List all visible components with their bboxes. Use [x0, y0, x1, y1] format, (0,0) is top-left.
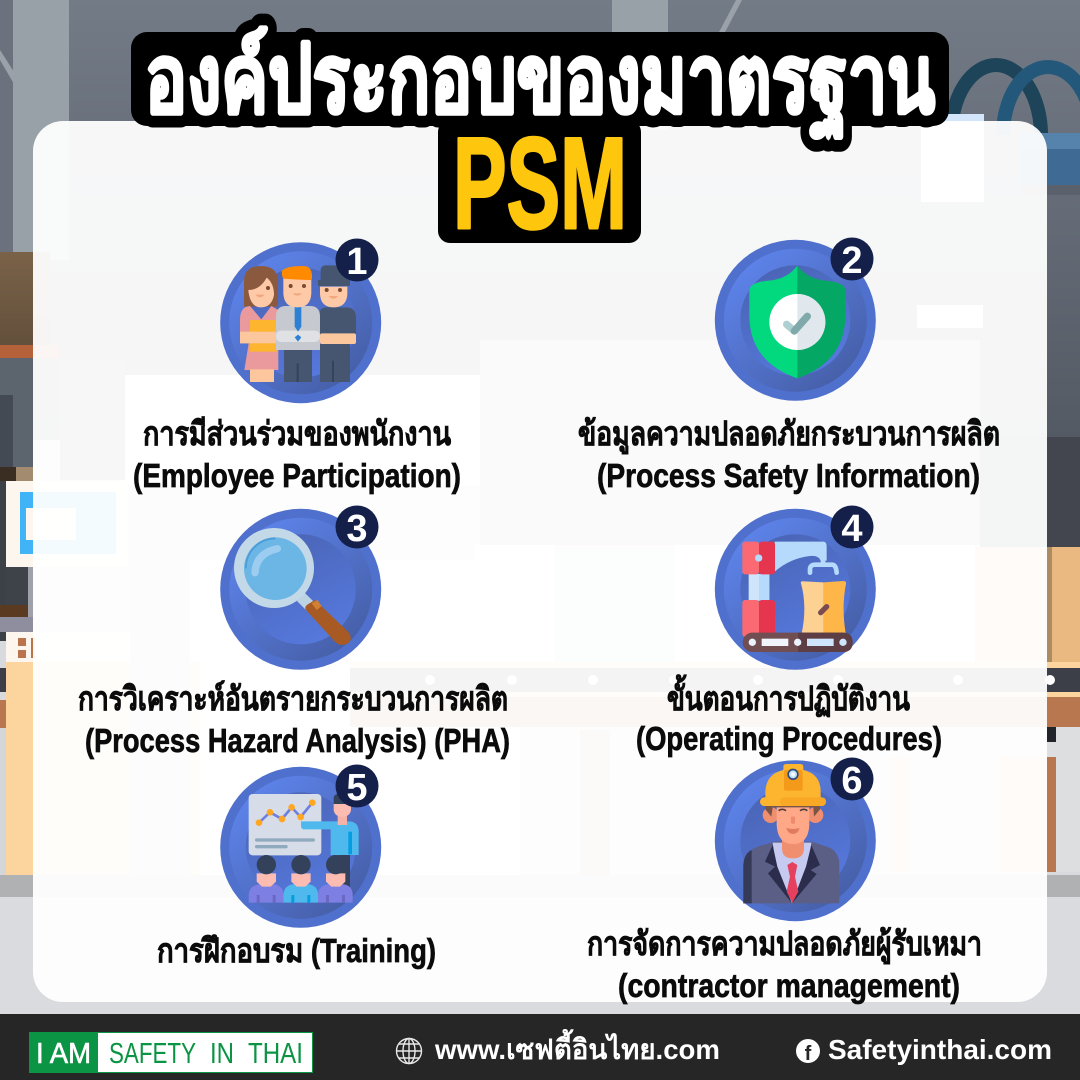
badge 4: 4 [841, 508, 863, 550]
background shapes behind the panel [60, 360, 125, 480]
facebook page text: Safetyinthai.com [828, 1034, 1052, 1065]
badge 3: 3 [346, 508, 368, 550]
item 1: employee participation [133, 238, 461, 494]
badge 2: 2 [841, 240, 863, 282]
icon: magnifying glass [220, 509, 381, 670]
logo: I AM Safety in Thai: I AM [36, 1038, 91, 1070]
item 2: process safety information [578, 238, 1000, 494]
badge 1: 1 [346, 241, 368, 283]
icon: three employees [220, 242, 381, 403]
icon: shield with check [715, 240, 876, 401]
badge 4 [830, 506, 874, 550]
logo: I AM Safety in Thai: THAI [248, 1038, 303, 1070]
title [131, 27, 949, 256]
label 4 [636, 674, 942, 757]
badge 6 [830, 758, 874, 802]
icon: globe [396, 1038, 422, 1064]
item 5: training [157, 764, 436, 969]
item 3: process hazard analysis [78, 506, 510, 759]
label 1 [133, 415, 461, 494]
label 6: (contractor management) [618, 967, 960, 1004]
label 3 [78, 680, 510, 759]
badge 6: 6 [841, 760, 863, 802]
website text: www.เซฟตี้อินไทย.com [434, 1028, 720, 1065]
label 1: (Employee Participation) [133, 457, 461, 494]
label 3: (Process Hazard Analysis) (PHA) [85, 722, 510, 759]
badge 5: 5 [346, 767, 368, 809]
heading line 2 backing [438, 120, 641, 243]
heading line 2: PSM: PSM [453, 110, 627, 256]
icon: presenter and audience [220, 767, 381, 928]
footer bar [0, 1014, 1080, 1080]
icon: facebook: f [805, 1043, 812, 1065]
logo: I AM Safety in Thai [29, 1032, 313, 1073]
panel: main white card [33, 121, 1047, 1002]
badge 2 [830, 238, 874, 282]
label 2: (Process Safety Information) [597, 457, 980, 494]
icon: contractor with hard hat [715, 760, 876, 921]
label 5: การฝึกอบรม (Training) [157, 932, 436, 969]
badge 5 [336, 764, 378, 809]
item 4: operating procedures [636, 506, 942, 757]
label 1: การมีส่วนร่วมของพนักงาน [143, 415, 451, 452]
label 6 [587, 925, 982, 1004]
logo: I AM Safety in Thai: IN [210, 1038, 234, 1070]
item 6: contractor management [587, 758, 982, 1004]
heading line 1 backing [131, 32, 949, 126]
label 4: ขั้นตอนการปฏิบัติงาน [667, 674, 910, 717]
label 4: (Operating Procedures) [636, 720, 942, 757]
label 2 [578, 415, 1000, 494]
icon: facebook [796, 1039, 820, 1065]
badge 3 [336, 506, 378, 550]
label 3: การวิเคราะห์อันตรายกระบวนการผลิต [78, 680, 508, 717]
logo: I AM Safety in Thai: SAFETY [109, 1038, 196, 1070]
label 6: การจัดการความปลอดภัยผู้รับเหมา [587, 925, 982, 965]
icon: robotic arm and conveyor [715, 509, 876, 670]
badge 1 [336, 238, 378, 283]
